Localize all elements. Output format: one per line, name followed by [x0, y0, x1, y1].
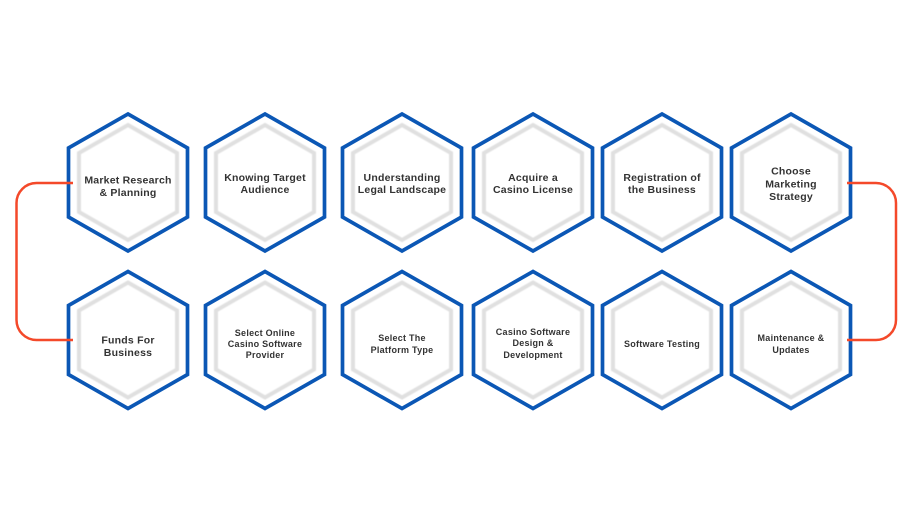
hexagon: Knowing Target Audience	[206, 114, 324, 251]
hexagon: Choose Marketing Strategy: Marketing	[765, 178, 817, 190]
hexagon: Software Testing: Software Testing	[624, 339, 700, 349]
hexagon: Acquire a Casino License: Acquire a	[508, 172, 558, 184]
hexagon: Casino Software Design & Development: Casino Software	[496, 327, 570, 337]
hexagon: Select The Platform Type: Select The	[378, 333, 426, 343]
hexagon: Understanding Legal Landscape	[342, 114, 462, 251]
hexagon: Casino Software Design & Development: Development	[503, 350, 563, 360]
hexagon: Market Research & Planning	[68, 114, 188, 251]
hexagon: Select Online Casino Software Provider: Select Online	[235, 328, 295, 338]
hexagon: Select Online Casino Software Provider: Provider	[246, 350, 285, 360]
hexagon: Funds For Business: Business	[104, 347, 152, 359]
hexagon: Select Online Casino Software Provider	[206, 272, 324, 408]
hexagon: Knowing Target Audience: Audience	[240, 184, 290, 196]
hexagon: Knowing Target Audience: Knowing Target	[224, 172, 306, 184]
hexagon: Registration of the Business: Registration of	[623, 172, 701, 184]
hexagon: Casino Software Design & Development: Design &	[512, 338, 554, 348]
hexagon: Casino Software Design & Development	[474, 272, 592, 408]
hexagon: Software Testing	[602, 272, 722, 408]
hexagon: Choose Marketing Strategy: Choose	[771, 166, 811, 178]
arrow: left connector	[16, 183, 73, 340]
hexagon: Maintenance & Updates: Maintenance &	[758, 333, 825, 343]
hexagon: Maintenance & Updates: Updates	[772, 345, 810, 355]
hexagon: Select The Platform Type: Platform Type	[371, 345, 433, 355]
hexagon: Choose Marketing Strategy	[732, 114, 850, 251]
arrow: right connector	[847, 183, 896, 340]
hexagon: Understanding Legal Landscape: Understanding	[364, 172, 440, 184]
hexagon: Registration of the Business: the Business	[628, 184, 696, 196]
hexagon: Choose Marketing Strategy: Strategy	[769, 191, 813, 203]
hexagon: Acquire a Casino License: Casino License	[493, 184, 573, 196]
hexagon: Funds For Business: Funds For	[101, 334, 155, 346]
hexagon: Understanding Legal Landscape: Legal Landscape	[358, 184, 446, 196]
hexagon: Maintenance & Updates	[732, 272, 850, 408]
hexagon: Funds For Business	[68, 272, 188, 408]
hexagon: Acquire a Casino License	[474, 114, 592, 251]
hexagon: Market Research & Planning: & Planning	[99, 187, 157, 199]
hexagon: Select The Platform Type	[342, 272, 462, 408]
hexagon: Select Online Casino Software Provider: Casino Software	[228, 339, 302, 349]
hexagon: Registration of the Business	[602, 114, 722, 251]
hexagon: Market Research & Planning: Market Research	[84, 174, 172, 186]
